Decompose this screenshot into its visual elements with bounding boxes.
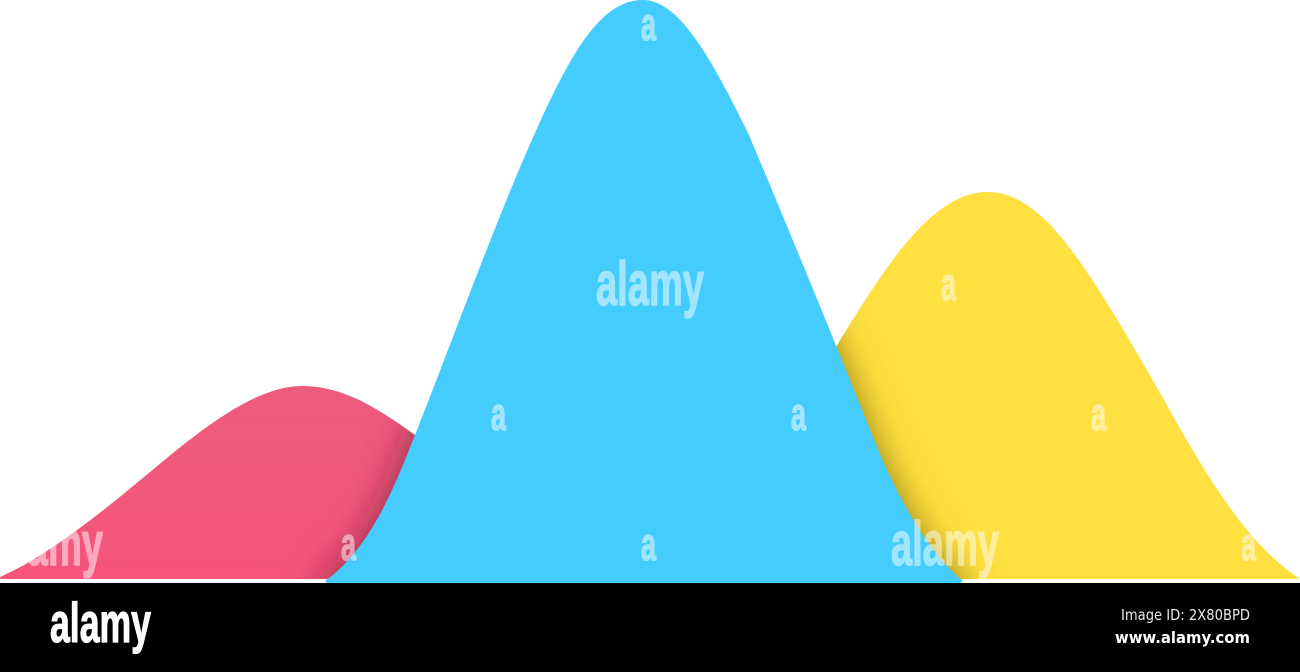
curve: pink small bell: [0, 386, 415, 579]
watermark: lower right: alamy: [891, 510, 999, 579]
watermark: small marks: [341, 0, 1256, 570]
watermark: small marks: a: [341, 518, 356, 570]
website: www.alamy.com: [1115, 628, 1250, 647]
curve: yellow medium bell: [836, 192, 1299, 579]
watermark: small marks: a: [1241, 518, 1256, 570]
watermark: small marks: a: [1091, 388, 1106, 440]
watermark: small marks: a: [791, 388, 806, 440]
watermark: small marks: a: [641, 518, 656, 570]
footer bar: [0, 583, 1300, 672]
watermark: lower left: alamy: [0, 510, 103, 579]
watermark: large centre: alamy: [596, 250, 704, 319]
image id: Image ID: 2X80BPD: [1121, 606, 1250, 624]
watermark: small marks: a: [941, 258, 956, 310]
watermark: small marks: a: [491, 388, 506, 440]
curve: blue tall bell: [325, 0, 963, 583]
footer logo: alamy: [50, 591, 151, 654]
